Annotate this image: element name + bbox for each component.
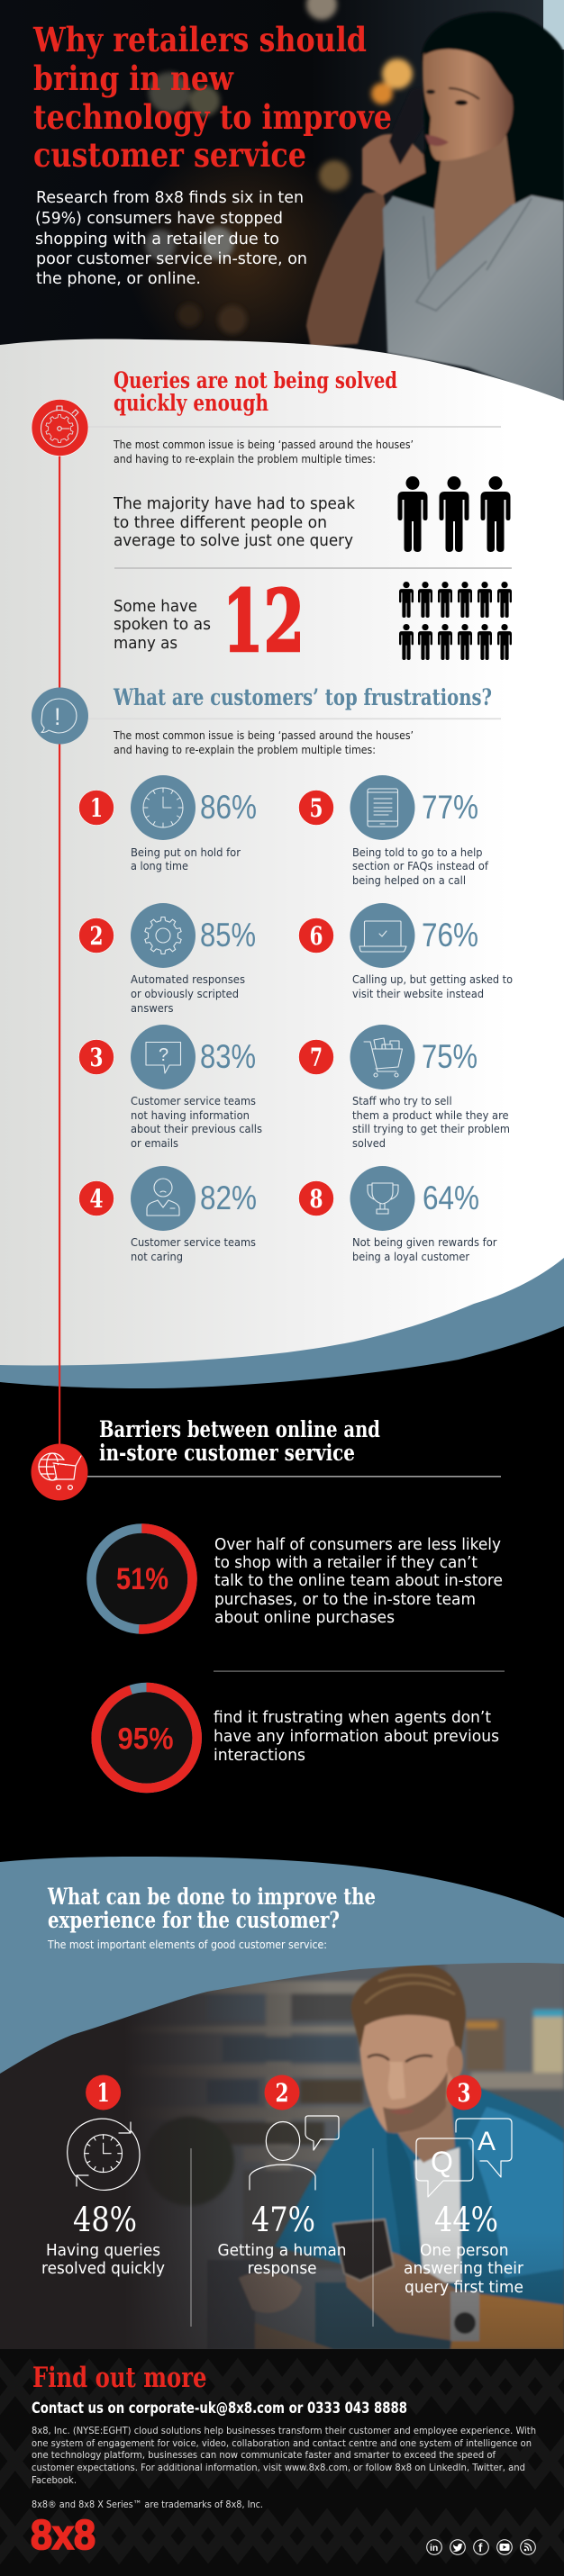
frustration 5: 5 [310, 793, 323, 823]
frustration 3: about their previous calls [131, 1123, 262, 1135]
frustration 7: solved [352, 1137, 386, 1150]
timeline connector [59, 455, 60, 1445]
main title: customer service [33, 135, 306, 175]
frustration 8: 64% [423, 1180, 479, 1216]
frustration 7: still trying to get their problem [352, 1123, 510, 1135]
frustration 3: 3 [90, 1043, 103, 1072]
stat text: 51%: about online purchases [214, 1608, 395, 1627]
frustration 7 [299, 1025, 510, 1150]
frustration 3: Customer service teams [131, 1095, 256, 1107]
intro copy: and having to re-explain the problem multiple times: [114, 744, 376, 756]
element 1: queries resolved quickly: Having queries [46, 2241, 160, 2260]
heading [114, 367, 397, 416]
company description: 8x8® and 8x8 X Series™ are trademarks of 8x8, Inc. [32, 2499, 263, 2510]
element 3: one person answering: answering their [404, 2259, 524, 2278]
frustration 6: 76% [422, 917, 478, 954]
intro copy [113, 729, 414, 756]
intro copy [113, 438, 414, 465]
footer [31, 2362, 536, 2558]
donut chart: 95%: 95% [117, 1722, 173, 1757]
icon: stopwatch badge [32, 400, 88, 456]
frustration 1: Being put on hold for [131, 846, 241, 859]
main title [32, 20, 392, 175]
element 2: getting a human response [218, 2074, 346, 2278]
icon: exclamation speech bubble: ! [54, 703, 61, 730]
frustration 4: 4 [90, 1184, 103, 1214]
statement: twelve people: spoken to as [114, 615, 211, 634]
company description: customer expectations. For additional information, visit www.8x8.com, or follow 8x8 on LinkedIn, Twitter, and [32, 2462, 525, 2473]
statement: twelve people [114, 597, 211, 653]
main title: Why retailers should [32, 20, 367, 59]
intro paragraph: (59%) consumers have stopped [35, 209, 283, 228]
frustration 5: section or FAQs instead of [352, 860, 489, 872]
frustration 4 [79, 1166, 257, 1263]
frustration 1: 86% [200, 789, 257, 826]
element 2: getting a human response: 2 [276, 2078, 288, 2108]
frustration 5: Being told to go to a help [352, 846, 483, 859]
intro copy: The most common issue is being ‘passed around the houses’ [113, 729, 414, 742]
hero text block [32, 20, 392, 288]
heading: Queries are not being solved [114, 367, 397, 393]
frustration 7: Staff who try to sell [352, 1095, 452, 1107]
statement: three people: The majority have had to speak [113, 494, 356, 513]
intro copy: and having to re-explain the problem multiple times: [114, 453, 376, 465]
intro paragraph: the phone, or online. [36, 269, 201, 288]
frustration 7: 7 [310, 1043, 323, 1072]
heading: experience for the customer? [48, 1907, 340, 1933]
stat text: 51% [214, 1535, 503, 1627]
heading: What can be done to improve the [47, 1884, 376, 1910]
social icons [427, 2540, 535, 2554]
statement: three people: to three different people on [114, 513, 327, 532]
frustration 7: 75% [422, 1038, 478, 1075]
frustration 1: 1 [90, 793, 103, 823]
statement: three people: average to solve just one query [114, 531, 353, 550]
frustration 6 [299, 903, 513, 1000]
frustration 8 [299, 1166, 497, 1263]
frustration 8: being a loyal customer [352, 1251, 469, 1263]
company description [32, 2425, 536, 2510]
stat text: 95%: interactions [214, 1746, 305, 1765]
hero photo: woman on phone [0, 0, 564, 423]
frustration 5: being helped on a call [352, 874, 466, 887]
subheading: The most important elements of good customer service: [47, 1939, 327, 1951]
frustration 2: 85% [200, 917, 256, 954]
icon: exclamation speech bubble [32, 688, 88, 744]
section: what can be done [41, 1884, 524, 2327]
frustration 1 [79, 775, 257, 872]
donut chart: 95% [96, 1687, 197, 1788]
blue panel background [0, 1857, 564, 2074]
frustration 5 [299, 775, 489, 887]
frustration 1: a long time [131, 860, 188, 872]
frustration 3: not having information [131, 1109, 250, 1122]
element 3: one person answering: query first time [405, 2278, 523, 2297]
element 3: one person answering: A [478, 2127, 496, 2156]
blue wave band [0, 1252, 564, 1388]
frustration 2 [79, 903, 256, 1015]
frustration 6: visit their website instead [352, 988, 484, 1000]
icon: three people [398, 476, 510, 552]
intro paragraph: Research from 8x8 finds six in ten [36, 188, 304, 207]
intro copy: The most common issue is being ‘passed around the houses’ [113, 438, 414, 451]
contact line: Contact us on corporate-uk@8x8.com or 0333 043 8888 [32, 2400, 407, 2418]
element 3: one person answering [404, 2074, 524, 2297]
frustration 4: Customer service teams [131, 1236, 256, 1249]
frustration 7: them a product while they are [352, 1109, 509, 1122]
frustration 6: 6 [310, 921, 323, 951]
statement: twelve people: Some have [114, 597, 197, 616]
statement: three people [113, 494, 356, 550]
social icons: in [430, 2543, 438, 2553]
stat text: 95%: find it frustrating when agents don’t [214, 1708, 491, 1727]
stat text: 95%: have any information about previous [214, 1727, 499, 1746]
social icons: f [478, 2541, 483, 2554]
element 3: one person answering: One person [420, 2241, 508, 2260]
frustration 8: 8 [310, 1184, 323, 1214]
frustration 4: not caring [131, 1251, 183, 1263]
heading [99, 1416, 380, 1466]
footer background pattern [0, 2349, 564, 2576]
element 1: queries resolved quickly: 48% [73, 2201, 137, 2239]
section: top frustrations [32, 684, 513, 1263]
frustration 4: 82% [200, 1180, 257, 1216]
element 3: one person answering: 3 [458, 2078, 470, 2108]
frustration 2: answers [131, 1002, 173, 1015]
heading: Barriers between online and [99, 1416, 380, 1442]
section: queries not solved quickly [32, 367, 512, 672]
icon: twelve people [399, 582, 512, 660]
intro paragraph: poor customer service in-store, on [36, 249, 307, 268]
company description: Facebook. [32, 2474, 77, 2486]
element 1: queries resolved quickly: resolved quickly [41, 2259, 165, 2278]
frustration 6: Calling up, but getting asked to [352, 973, 513, 986]
stat text: 51%: Over half of consumers are less likely [214, 1535, 501, 1554]
element 1: queries resolved quickly [41, 2074, 165, 2278]
heading: in-store customer service [99, 1440, 355, 1466]
intro paragraph: shopping with a retailer due to [35, 230, 279, 249]
company description: one technology platform, businesses can now communicate faster and smarter to exceed the speed of [32, 2449, 496, 2461]
element 2: getting a human response: 47% [251, 2201, 315, 2239]
intro paragraph [35, 188, 307, 288]
frustration 3: 83% [200, 1038, 256, 1075]
element 3: one person answering: 44% [434, 2201, 498, 2239]
frustration 5: 77% [422, 789, 478, 826]
frustration 3: or emails [131, 1137, 178, 1150]
icon: globe and cart badge [31, 1444, 88, 1500]
heading [47, 1884, 376, 1933]
statement: twelve people: many as [114, 634, 177, 653]
element 2: getting a human response: Getting a human [218, 2241, 346, 2260]
section: barriers between online and in-store [31, 1416, 505, 1788]
stat text: 95% [214, 1708, 499, 1765]
element 2: getting a human response: response [248, 2259, 317, 2278]
stat text: 51%: to shop with a retailer if they can’t [214, 1553, 478, 1572]
main title: technology to improve [33, 97, 392, 137]
heading: Find out more [32, 2362, 207, 2394]
main title: bring in new [33, 59, 234, 98]
stat text: 51%: talk to the online team about in-store [214, 1571, 503, 1590]
stat text: 51%: purchases, or to the in-store team [214, 1590, 476, 1609]
logo: 8x8: 8x8 [31, 2511, 96, 2558]
frustration 8: Not being given rewards for [352, 1236, 497, 1249]
frustration 2: 2 [90, 921, 103, 951]
donut chart: 51%: 51% [116, 1562, 168, 1596]
donut chart: 51% [92, 1529, 193, 1630]
element 1: queries resolved quickly: 1 [97, 2078, 110, 2108]
frustration 2: or obviously scripted [131, 988, 239, 1000]
frustration 3 [79, 1025, 262, 1150]
heading: quickly enough [114, 390, 268, 416]
number 12: 12 [223, 572, 305, 672]
bottom photo: man with smartphone [0, 1958, 564, 2349]
light content panel [0, 339, 564, 1365]
frustration 2: Automated responses [131, 973, 245, 986]
element 3: one person answering: Q [431, 2146, 453, 2178]
frustration 3: ? [159, 1045, 168, 1065]
